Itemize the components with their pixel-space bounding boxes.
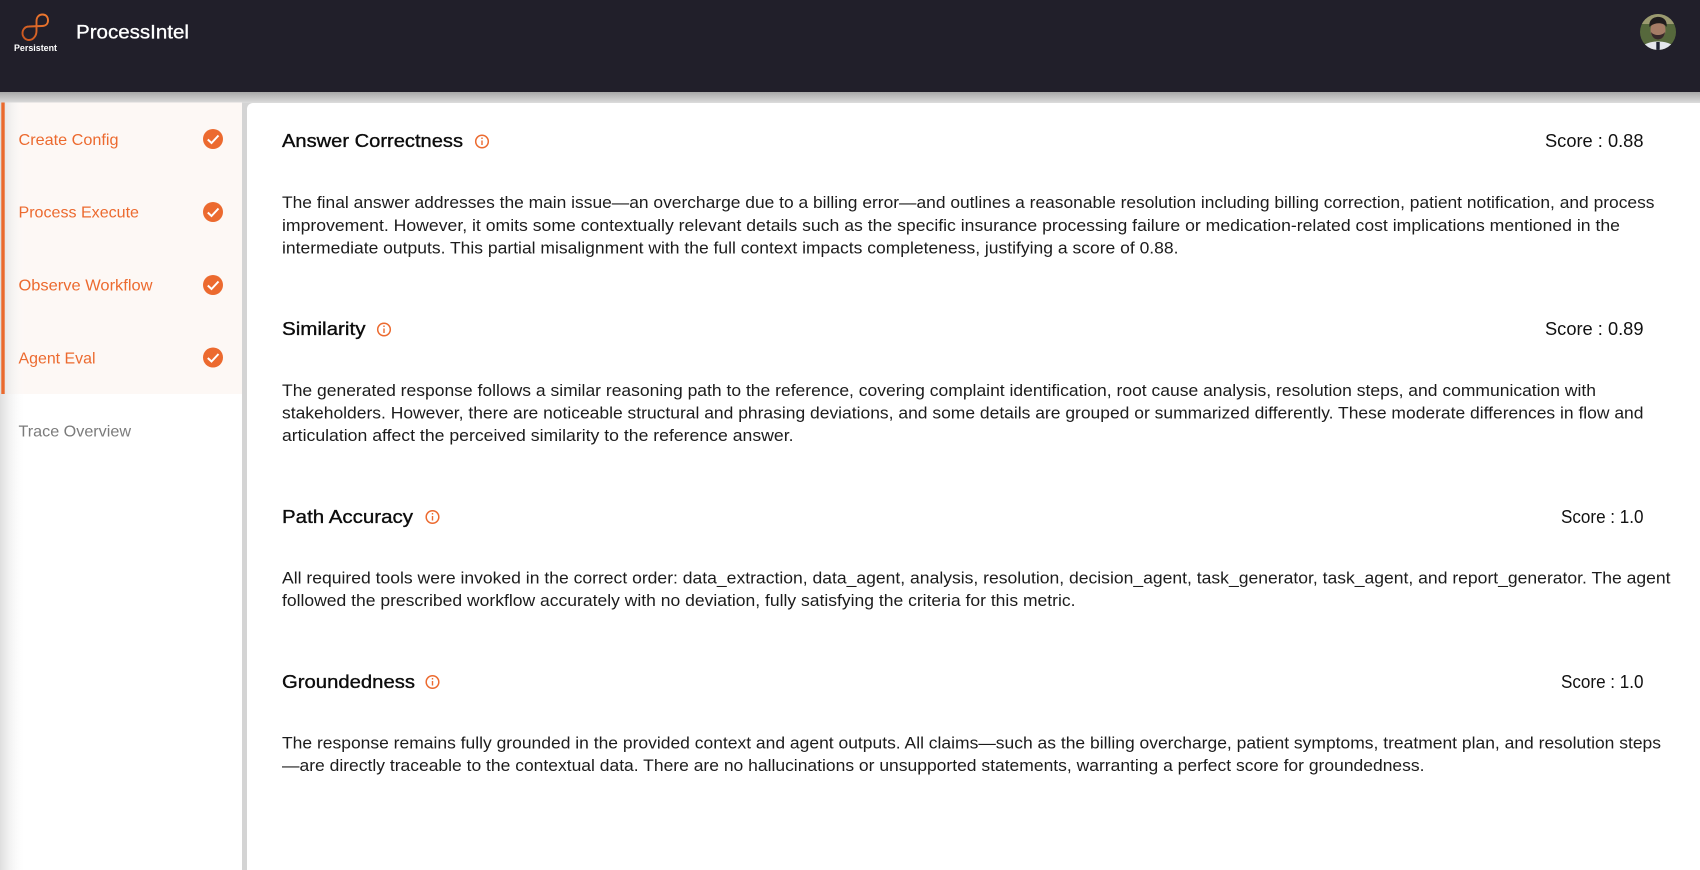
nav item: Observe Workflow bbox=[18, 275, 223, 295]
description: intermediate outputs. This partial misalignment with the full context impacts completeness, justifying a score of 0.88. bbox=[282, 238, 1178, 258]
description bbox=[282, 734, 1661, 775]
description: —are directly traceable to the contextual data. There are no hallucinations or unsupported statements, warranting a perfect score for groundedness. bbox=[282, 756, 1424, 775]
description: articulation affect the perceived similarity to the reference answer. bbox=[282, 426, 794, 445]
icon: info bbox=[476, 135, 488, 148]
description bbox=[282, 381, 1644, 445]
description: The final answer addresses the main issue—an overcharge due to a billing error—and outlines a reasonable resolution including billing correction, patient notification, and process bbox=[282, 193, 1654, 212]
nav item: Create Config bbox=[18, 129, 223, 149]
section: Groundedness bbox=[282, 671, 1661, 775]
icon: Persistent logo: Persistent bbox=[14, 43, 58, 54]
heading: Similarity bbox=[282, 318, 366, 339]
nav item: Agent Eval: Agent Eval bbox=[18, 350, 96, 368]
heading: Path Accuracy bbox=[282, 506, 414, 527]
header bar bbox=[0, 0, 1700, 92]
nav item: Observe Workflow: Observe Workflow bbox=[18, 278, 153, 294]
score: Score : 1.0 bbox=[1561, 507, 1644, 527]
nav item: Agent Eval bbox=[18, 348, 223, 368]
score: Score : 0.88 bbox=[1545, 131, 1644, 151]
section: Path Accuracy bbox=[282, 506, 1671, 610]
description: The response remains fully grounded in the provided context and agent outputs. All claims—such as the billing overcharge, patient symptoms, treatment plan, and resolution steps bbox=[282, 734, 1661, 752]
heading: Groundedness bbox=[282, 671, 415, 692]
panel: main evaluation results bbox=[247, 103, 1700, 870]
nav item: Create Config: Create Config bbox=[18, 132, 118, 149]
description bbox=[282, 193, 1654, 258]
icon: user avatar bbox=[1640, 14, 1676, 51]
score: Score : 1.0 bbox=[1561, 672, 1644, 692]
panel: sidebar navigation bbox=[0, 102, 242, 870]
description: The generated response follows a similar reasoning path to the reference, covering complaint identification, root cause analysis, resolution steps, and communication with bbox=[282, 381, 1596, 400]
section: Similarity bbox=[282, 318, 1644, 445]
description: stakeholders. However, there are noticeable structural and phrasing deviations, and some details are grouped or summarized differently. These moderate differences in flow and bbox=[282, 404, 1644, 422]
heading: Answer Correctness bbox=[282, 130, 463, 151]
icon: info bbox=[426, 511, 439, 523]
description: All required tools were invoked in the correct order: data_extraction, data_agent, analysis, resolution, decision_agent, task_generator, task_agent, and report_generator. The agent bbox=[282, 568, 1671, 588]
nav item: Process Execute: Process Execute bbox=[18, 204, 139, 222]
nav item: Process Execute bbox=[18, 202, 223, 222]
icon: info bbox=[378, 323, 390, 336]
description: improvement. However, it omits some contextually relevant details such as the specific insurance processing failure or medication-related cost implications mentioned in the bbox=[282, 216, 1620, 235]
description: followed the prescribed workflow accurately with no deviation, fully satisfying the criteria for this metric. bbox=[282, 591, 1076, 610]
nav item: Trace Overview: Trace Overview bbox=[18, 424, 131, 440]
score: Score : 0.89 bbox=[1545, 319, 1644, 339]
icon: info bbox=[426, 676, 439, 688]
section: Answer Correctness bbox=[282, 130, 1654, 258]
app title: ProcessIntel bbox=[76, 22, 189, 44]
icon: Persistent logo bbox=[14, 14, 58, 54]
description bbox=[282, 568, 1671, 610]
